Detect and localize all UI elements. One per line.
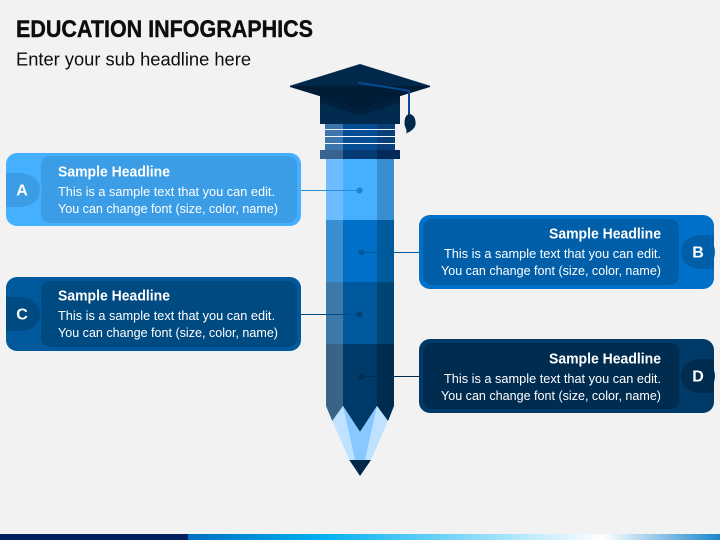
panel A body text — [58, 185, 278, 216]
panel B body text: You can change font (size, color, name) — [441, 264, 661, 278]
panel B body text: This is a sample text that you can edit. — [444, 247, 661, 261]
panel: B — [419, 215, 714, 289]
icon: graduation cap — [290, 64, 430, 134]
panel: A — [6, 153, 301, 226]
connector: C — [301, 312, 362, 318]
panel D body text — [441, 372, 661, 403]
panel A body text: This is a sample text that you can edit. — [58, 185, 275, 199]
connector: B — [358, 250, 419, 256]
panel: C — [6, 277, 301, 351]
panel A headline: Sample Headline — [58, 164, 170, 180]
panel B body text — [441, 247, 661, 278]
connector: D — [358, 374, 419, 380]
panel C body text: You can change font (size, color, name) — [58, 326, 278, 340]
footer bar — [0, 534, 720, 540]
panel A letter: A — [16, 182, 28, 200]
panel: D — [419, 339, 714, 413]
panel B headline: Sample Headline — [549, 226, 661, 242]
panel C body text: This is a sample text that you can edit. — [58, 309, 275, 323]
panel A body text: You can change font (size, color, name) — [58, 202, 278, 216]
pencil body segments — [326, 159, 394, 432]
pencil illustration — [290, 64, 430, 476]
pencil collar — [320, 124, 400, 159]
panel C body text — [58, 309, 278, 340]
connector: A — [301, 188, 362, 194]
panel C letter: C — [16, 306, 28, 324]
panel D body text: You can change font (size, color, name) — [441, 389, 661, 403]
pencil tip — [332, 406, 388, 476]
title: EDUCATION INFOGRAPHICS — [16, 16, 313, 43]
panel D body text: This is a sample text that you can edit. — [444, 372, 661, 386]
panel D headline: Sample Headline — [549, 352, 661, 368]
subtitle: Enter your sub headline here — [16, 48, 251, 70]
panel C headline: Sample Headline — [58, 288, 170, 304]
panel B letter: B — [692, 244, 704, 262]
panel D letter: D — [692, 368, 704, 386]
